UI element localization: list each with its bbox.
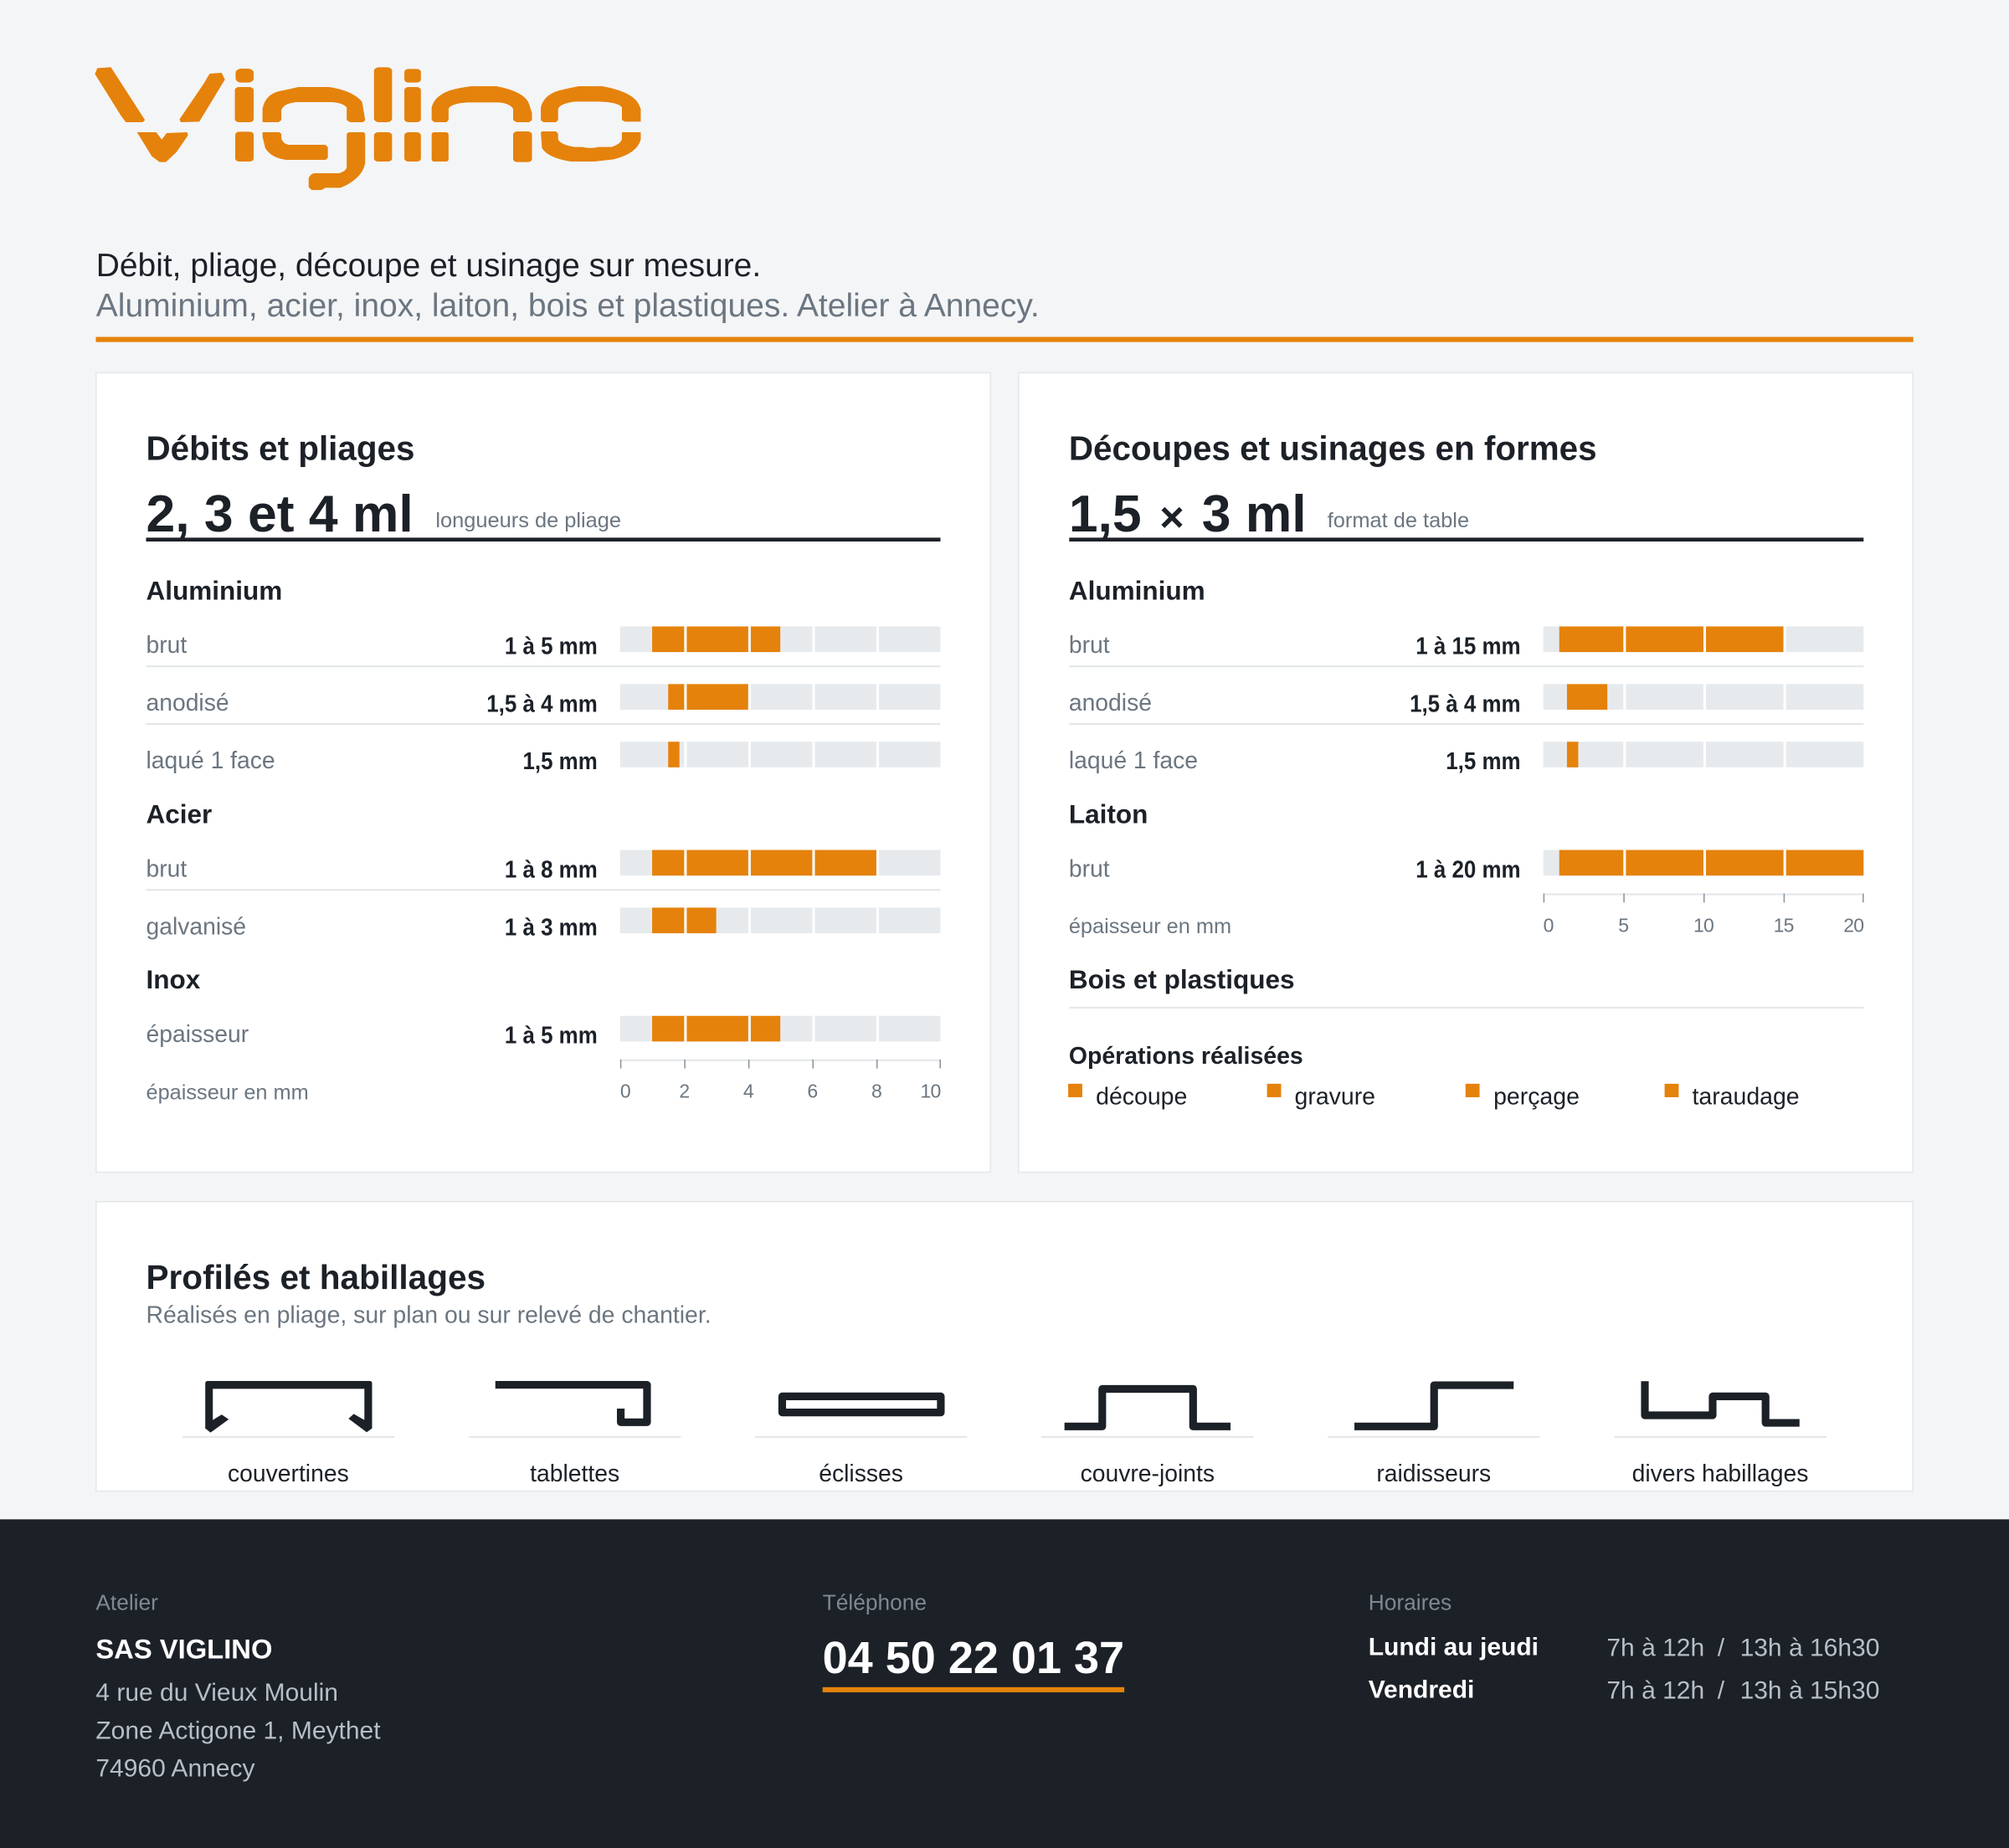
row: inox épaisseur: 1 à 5 mm	[505, 1022, 598, 1049]
axis: épaisseur 0 à 20 mm: 0	[1544, 915, 1554, 937]
key figure: longueurs de pliage	[146, 485, 940, 543]
axis: épaisseur 0 à 10 mm: 4	[743, 1081, 754, 1102]
axis: épaisseur 0 à 10 mm: 0	[620, 1081, 630, 1102]
footer: horaires: 13h à 16h30	[1740, 1634, 1879, 1661]
row: aluminium brut: brut	[1069, 631, 1110, 658]
row: aluminium anodisé: anodisé	[1069, 689, 1152, 716]
profile: couvre-joints: couvre-joints	[1081, 1460, 1215, 1486]
row: aluminium anodisé	[146, 684, 940, 725]
tagline: Débit, pliage, découpe et usinage sur mesure.	[96, 248, 761, 284]
subtitle: Réalisés en pliage, sur plan ou sur relevé de chantier.	[146, 1302, 712, 1329]
footer: horaires: Horaires	[1369, 1589, 1452, 1614]
footer: horaires: Vendredi	[1369, 1676, 1474, 1703]
footer: horaires: 7h à 12h	[1606, 1676, 1704, 1704]
key figure: format de table: ×	[1159, 493, 1184, 541]
row: aluminium laqué 1 face	[1069, 742, 1863, 774]
profile: raidisseurs	[1328, 1385, 1539, 1486]
footer: atelier: Zone Actigone 1, Meythet	[95, 1717, 381, 1745]
row: acier galvanisé	[146, 907, 940, 941]
key figure: format de table: 1,5	[1069, 485, 1142, 543]
row: aluminium anodisé: 1,5 à 4 mm	[1410, 690, 1521, 717]
row: aluminium anodisé: 1,5 à 4 mm	[486, 690, 598, 717]
axis: épaisseur 0 à 20 mm: 15	[1774, 915, 1794, 937]
footer: horaires	[1369, 1589, 1879, 1704]
footer: atelier: 4 rue du Vieux Moulin	[95, 1679, 338, 1707]
profile: raidisseurs: raidisseurs	[1376, 1460, 1491, 1486]
axis: épaisseur 0 à 10 mm: épaisseur en mm	[146, 1081, 309, 1104]
legend item: perçage: perçage	[1493, 1083, 1580, 1110]
material: aluminium: Aluminium	[146, 575, 282, 605]
row: acier brut	[146, 850, 940, 891]
row: aluminium laqué 1 face: 1,5 mm	[522, 747, 598, 774]
row: laiton brut	[1069, 850, 1863, 883]
legend: opérations réalisées	[1068, 1043, 1800, 1110]
row: acier brut: 1 à 8 mm	[505, 855, 598, 883]
material: inox: Inox	[146, 964, 201, 994]
row: aluminium anodisé	[1069, 684, 1863, 725]
header orange rule	[95, 337, 1914, 342]
row: aluminium laqué 1 face	[146, 742, 940, 774]
key figure: format de table: 3 ml	[1202, 485, 1307, 543]
profile: éclisses: éclisses	[819, 1460, 903, 1486]
axis: épaisseur 0 à 10 mm: 6	[807, 1081, 817, 1102]
row: aluminium laqué 1 face: laqué 1 face	[146, 747, 275, 773]
footer: atelier: Atelier	[95, 1589, 158, 1614]
footer: atelier: 74960 Annecy	[95, 1755, 255, 1783]
row: aluminium anodisé: anodisé	[146, 689, 229, 716]
axis: épaisseur 0 à 10 mm: 10	[920, 1081, 940, 1102]
row: aluminium brut: brut	[146, 631, 187, 658]
axis: épaisseur 0 à 10 mm: 8	[871, 1081, 881, 1102]
row: aluminium brut	[146, 626, 940, 667]
axis: épaisseur 0 à 20 mm: 5	[1618, 915, 1628, 937]
material: aluminium: Aluminium	[1069, 575, 1205, 605]
footer: horaires: /	[1718, 1676, 1725, 1704]
legend item: découpe: découpe	[1096, 1083, 1187, 1110]
profile: tablettes	[469, 1385, 681, 1486]
material: bois et plastiques: Bois et plastiques	[1069, 964, 1295, 994]
legend item: gravure: gravure	[1295, 1083, 1375, 1110]
key figure: format de table: format de table	[1328, 509, 1469, 532]
axis: épaisseur 0 à 20 mm: épaisseur en mm	[1069, 915, 1231, 938]
profile: couvertines: couvertines	[228, 1460, 349, 1486]
row: acier galvanisé: 1 à 3 mm	[505, 913, 598, 941]
material: acier: Acier	[146, 799, 212, 829]
panel: débits et pliages	[96, 372, 990, 1173]
profile: couvre-joints	[1041, 1389, 1254, 1486]
row: acier brut: brut	[146, 855, 187, 881]
heading: débits et pliages: Débits et pliages	[146, 429, 414, 467]
profile: éclisses	[755, 1396, 967, 1486]
legend item: taraudage: taraudage	[1692, 1083, 1800, 1110]
heading: profilés et habillages: Profilés et habillages	[146, 1258, 486, 1296]
axis: épaisseur 0 à 20 mm: 20	[1843, 915, 1863, 937]
footer: horaires: /	[1718, 1634, 1725, 1661]
row: aluminium brut	[1069, 626, 1863, 667]
tagline	[96, 248, 1040, 324]
footer: téléphone: 04 50 22 01 37	[823, 1633, 1124, 1683]
row: acier galvanisé: galvanisé	[146, 912, 246, 939]
axis: épaisseur 0 à 20 mm: 10	[1693, 915, 1714, 937]
axis: épaisseur 0 à 20 mm	[1069, 894, 1864, 938]
row: aluminium brut: 1 à 5 mm	[505, 632, 598, 660]
tagline: Aluminium, acier, inox, laiton, bois et plastiques. Atelier à Annecy.	[96, 288, 1040, 324]
footer: atelier	[95, 1589, 381, 1783]
key figure: longueurs de pliage: longueurs de pliage	[435, 509, 621, 532]
footer: téléphone	[823, 1589, 1124, 1692]
legend: opérations réalisées: Opérations réalisées	[1069, 1043, 1303, 1070]
axis: épaisseur 0 à 10 mm	[146, 1060, 941, 1104]
row: inox épaisseur	[146, 1016, 940, 1049]
heading: découpes et usinages: Découpes et usinages en formes	[1069, 429, 1597, 467]
material: laiton: Laiton	[1069, 799, 1148, 829]
panel: profilés et habillages	[96, 1202, 1913, 1491]
row: aluminium laqué 1 face: 1,5 mm	[1446, 747, 1521, 774]
row: aluminium brut: 1 à 15 mm	[1416, 632, 1521, 660]
row: laiton brut: 1 à 20 mm	[1416, 855, 1521, 883]
profile: divers habillages: divers habillages	[1632, 1460, 1808, 1486]
key figure: longueurs de pliage: 2, 3 et 4 ml	[146, 485, 414, 543]
row: inox épaisseur: épaisseur	[146, 1020, 249, 1047]
key figure: format de table	[1069, 485, 1863, 543]
footer: horaires: 13h à 15h30	[1740, 1676, 1879, 1704]
footer: atelier: SAS VIGLINO	[95, 1633, 272, 1664]
profile: couvertines	[182, 1381, 394, 1486]
panel: découpes et usinages en formes	[1019, 372, 1913, 1173]
logo: Viglino	[95, 68, 640, 190]
row: aluminium laqué 1 face: laqué 1 face	[1069, 747, 1198, 773]
footer: horaires: Lundi au jeudi	[1369, 1634, 1539, 1661]
profile: divers habillages	[1614, 1381, 1827, 1486]
footer: téléphone: Téléphone	[823, 1589, 927, 1614]
row: laiton brut: brut	[1069, 855, 1110, 881]
profile: tablettes: tablettes	[530, 1460, 619, 1486]
footer	[0, 1519, 2009, 1848]
axis: épaisseur 0 à 10 mm: 2	[679, 1081, 689, 1102]
footer: horaires: 7h à 12h	[1606, 1634, 1704, 1661]
